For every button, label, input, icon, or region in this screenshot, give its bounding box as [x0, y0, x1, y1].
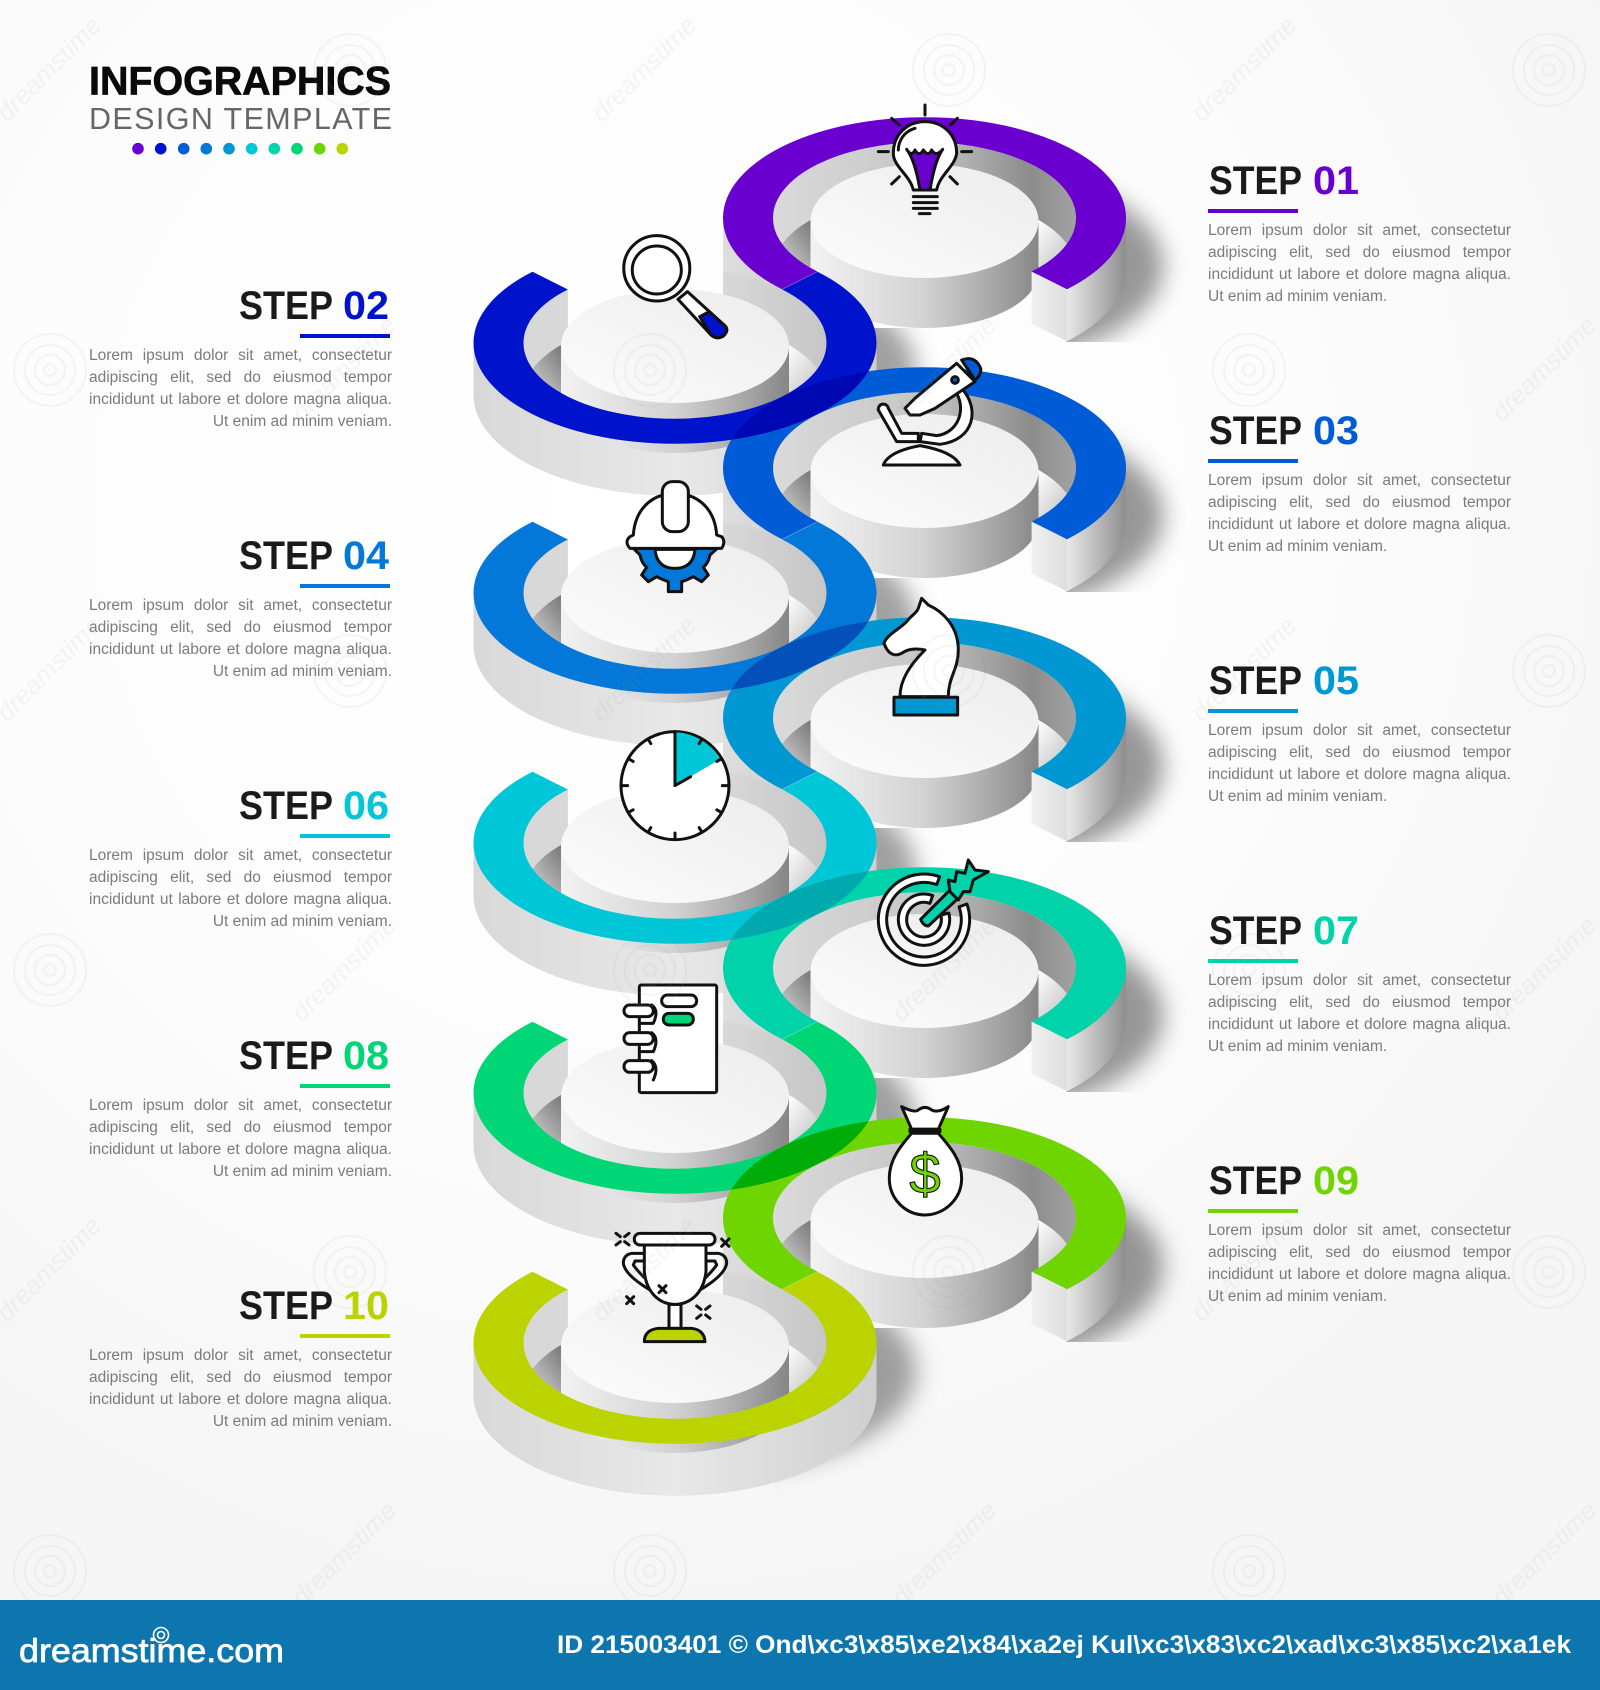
heading: step 08: 08 [343, 1034, 389, 1078]
heading: step 03 [1209, 409, 1359, 453]
icon: helmet and gear [627, 482, 724, 592]
title: infographics: INFOGRAPHICS [89, 60, 391, 104]
text: dreamstime [1485, 310, 1600, 427]
body: step 05: Lorem ipsum dolor sit amet, consectetur [1208, 722, 1511, 739]
body: step 09 [1208, 1222, 1511, 1305]
heading: step 10: 10 [343, 1284, 389, 1328]
body: step 07: Lorem ipsum dolor sit amet, consectetur [1208, 972, 1511, 989]
body: step 09: Ut enim ad minim veniam. [1208, 1288, 1387, 1305]
heading: step 09: STEP [1209, 1159, 1302, 1203]
ring 1: purple [723, 130, 1164, 366]
overlap: ring 2 and 3 [731, 371, 868, 440]
underline: step 06 [300, 834, 390, 838]
underline: step 01 [1208, 208, 1298, 212]
body: step 04 [89, 597, 392, 680]
heading: step 06 [239, 784, 389, 828]
body: step 02 [89, 347, 392, 430]
body: step 10: Lorem ipsum dolor sit amet, consectetur [89, 1347, 392, 1364]
text: dreamstime [885, 310, 1002, 427]
ring 9: lime green [723, 1130, 1164, 1366]
body: step 10: adipiscing elit, sed do eiusmod tempor [89, 1369, 392, 1386]
ring 4: azure [474, 521, 916, 746]
body: step 05 [1208, 722, 1511, 805]
text block: step 03 [1208, 409, 1511, 555]
overlap: ring 4 and 5 [731, 621, 868, 690]
body: step 09: Lorem ipsum dolor sit amet, consectetur [1208, 1222, 1511, 1239]
text: dreamstime [1485, 910, 1600, 1027]
body: step 07: adipiscing elit, sed do eiusmod tempor [1208, 994, 1511, 1011]
heading: step 06: 06 [343, 784, 389, 828]
text: dreamstime [585, 610, 702, 727]
body: step 10: incididunt ut labore et dolore magna aliqua. [89, 1391, 392, 1408]
ring 6: cyan [474, 771, 916, 996]
body: step 04: Ut enim ad minim veniam. [213, 663, 392, 680]
body: step 06: Lorem ipsum dolor sit amet, consectetur [89, 847, 392, 864]
heading: step 03: STEP [1209, 409, 1302, 453]
icon: clock [621, 732, 729, 840]
underline: step 05 [1208, 708, 1298, 712]
body: step 02: incididunt ut labore et dolore magna aliqua. [89, 391, 392, 408]
footer logo: dreamstime.com [19, 1632, 284, 1669]
body: step 08: Lorem ipsum dolor sit amet, consectetur [89, 1097, 392, 1114]
body: step 05: adipiscing elit, sed do eiusmod tempor [1208, 744, 1511, 761]
body: step 01 [1208, 222, 1511, 305]
underline: step 08 [300, 1084, 390, 1088]
heading: step 05: 05 [1313, 659, 1359, 703]
heading: step 02: 02 [343, 284, 389, 328]
ring 2: dark blue [474, 271, 916, 496]
text: dreamstime [1185, 610, 1302, 727]
title colour dots [132, 143, 348, 154]
heading: step 02: STEP [239, 284, 333, 328]
heading: step 10 [239, 1284, 389, 1328]
body: step 04: incididunt ut labore et dolore magna aliqua. [89, 641, 392, 658]
body: step 07: incididunt ut labore et dolore magna aliqua. [1208, 1016, 1511, 1033]
icon: microscope [878, 359, 981, 465]
heading: step 07 [1209, 909, 1359, 953]
body: step 07: Ut enim ad minim veniam. [1208, 1038, 1387, 1055]
icon: trophy [616, 1233, 729, 1342]
text: dreamstime [1185, 10, 1302, 127]
text: dreamstime [885, 1495, 1002, 1612]
body: step 08: Ut enim ad minim veniam. [213, 1163, 392, 1180]
text: dreamstime [285, 310, 402, 427]
body: step 03: Ut enim ad minim veniam. [1208, 538, 1387, 555]
body: step 01: Ut enim ad minim veniam. [1208, 288, 1387, 305]
body: step 02: Ut enim ad minim veniam. [213, 413, 392, 430]
heading: step 04: 04 [343, 534, 390, 578]
body: step 10: Ut enim ad minim veniam. [213, 1413, 392, 1430]
body: step 03: incididunt ut labore et dolore magna aliqua. [1208, 516, 1511, 533]
heading: step 09: 09 [1313, 1159, 1359, 1203]
heading: step 01: 01 [1313, 159, 1359, 203]
body: step 06 [89, 847, 392, 930]
underline: step 09 [1208, 1208, 1298, 1212]
overlap: ring 8 and 9 [731, 1121, 868, 1190]
text block: step 10 [89, 1284, 392, 1430]
icon: money bag: $ [909, 1143, 941, 1206]
body: step 03: adipiscing elit, sed do eiusmod tempor [1208, 494, 1511, 511]
text: dreamstime [285, 910, 402, 1027]
underline: step 03 [1208, 458, 1298, 462]
heading: step 01 [1209, 159, 1359, 203]
subtitle: design template: DESIGN TEMPLATE [89, 102, 392, 136]
body: step 01: adipiscing elit, sed do eiusmod tempor [1208, 244, 1511, 261]
ring 10: yellow green [474, 1271, 916, 1496]
body: step 05: incididunt ut labore et dolore magna aliqua. [1208, 766, 1511, 783]
heading: step 03: 03 [1313, 409, 1359, 453]
body: step 01: incididunt ut labore et dolore magna aliqua. [1208, 266, 1511, 283]
icon: target and arrow [878, 860, 988, 965]
text block: step 04 [89, 534, 392, 680]
heading: step 08: STEP [239, 1034, 333, 1078]
icon: chess knight [884, 598, 958, 715]
heading: step 07: STEP [1209, 909, 1302, 953]
body: step 02: Lorem ipsum dolor sit amet, consectetur [89, 347, 392, 364]
ring 7: teal [723, 880, 1164, 1116]
text block: step 07 [1208, 909, 1511, 1055]
body: step 09: incididunt ut labore et dolore magna aliqua. [1208, 1266, 1511, 1283]
body: step 08 [89, 1097, 392, 1180]
heading: step 04 [239, 534, 390, 578]
text block: step 01 [1208, 159, 1511, 305]
heading: step 08 [239, 1034, 389, 1078]
text: dreamstime [1485, 1495, 1600, 1612]
ring 8: green [474, 1021, 916, 1246]
heading: step 04: STEP [239, 534, 333, 578]
body: step 05: Ut enim ad minim veniam. [1208, 788, 1387, 805]
icon: magnifying glass [624, 236, 727, 338]
icon: light bulb [878, 105, 972, 214]
body: step 01: Lorem ipsum dolor sit amet, consectetur [1208, 222, 1511, 239]
body: step 08: incididunt ut labore et dolore magna aliqua. [89, 1141, 392, 1158]
footer credit: ID 215003401 © Ond\xc3\x85\xe2\x84\xa2ej Kul\xc3\x83\xc2\xad\xc3\x85\xc2\xa1ek [557, 1631, 1571, 1659]
heading: step 06: STEP [239, 784, 333, 828]
body: step 07 [1208, 972, 1511, 1055]
body: step 09: adipiscing elit, sed do eiusmod tempor [1208, 1244, 1511, 1261]
heading: step 10: STEP [239, 1284, 333, 1328]
footer bar [0, 1600, 1600, 1690]
text: dreamstime [885, 910, 1002, 1027]
body: step 08: adipiscing elit, sed do eiusmod tempor [89, 1119, 392, 1136]
heading: step 07: 07 [1313, 909, 1359, 953]
overlap: ring 6 and 7 [731, 871, 868, 940]
text block: step 02 [89, 284, 392, 430]
body: step 02: adipiscing elit, sed do eiusmod tempor [89, 369, 392, 386]
text: dreamstime [1185, 1210, 1302, 1327]
text: dreamstime [585, 10, 702, 127]
body: step 10 [89, 1347, 392, 1430]
text: dreamstime [285, 1495, 402, 1612]
ring 3: blue [723, 380, 1164, 616]
heading: step 05 [1209, 659, 1359, 703]
text: dreamstime [585, 1210, 702, 1327]
body: step 06: adipiscing elit, sed do eiusmod tempor [89, 869, 392, 886]
body: step 03: Lorem ipsum dolor sit amet, consectetur [1208, 472, 1511, 489]
body: step 06: Ut enim ad minim veniam. [213, 913, 392, 930]
body: step 04: adipiscing elit, sed do eiusmod tempor [89, 619, 392, 636]
icon: money bag [889, 1107, 962, 1215]
ring 5: sky blue [723, 630, 1164, 866]
text block: step 06 [89, 784, 392, 930]
icon: notebook [624, 985, 717, 1093]
heading: step 02 [239, 284, 389, 328]
body: step 03 [1208, 472, 1511, 555]
body: step 04: Lorem ipsum dolor sit amet, consectetur [89, 597, 392, 614]
heading: step 01: STEP [1209, 159, 1302, 203]
body: step 06: incididunt ut labore et dolore magna aliqua. [89, 891, 392, 908]
underline: step 04 [300, 584, 390, 588]
text block: step 08 [89, 1034, 392, 1180]
heading: step 05: STEP [1209, 659, 1302, 703]
heading: step 09 [1209, 1159, 1359, 1203]
underline: step 02 [300, 334, 390, 338]
underline: step 07 [1208, 958, 1298, 962]
underline: step 10 [300, 1334, 390, 1338]
text block: step 05 [1208, 659, 1511, 805]
text block: step 09 [1208, 1159, 1511, 1305]
